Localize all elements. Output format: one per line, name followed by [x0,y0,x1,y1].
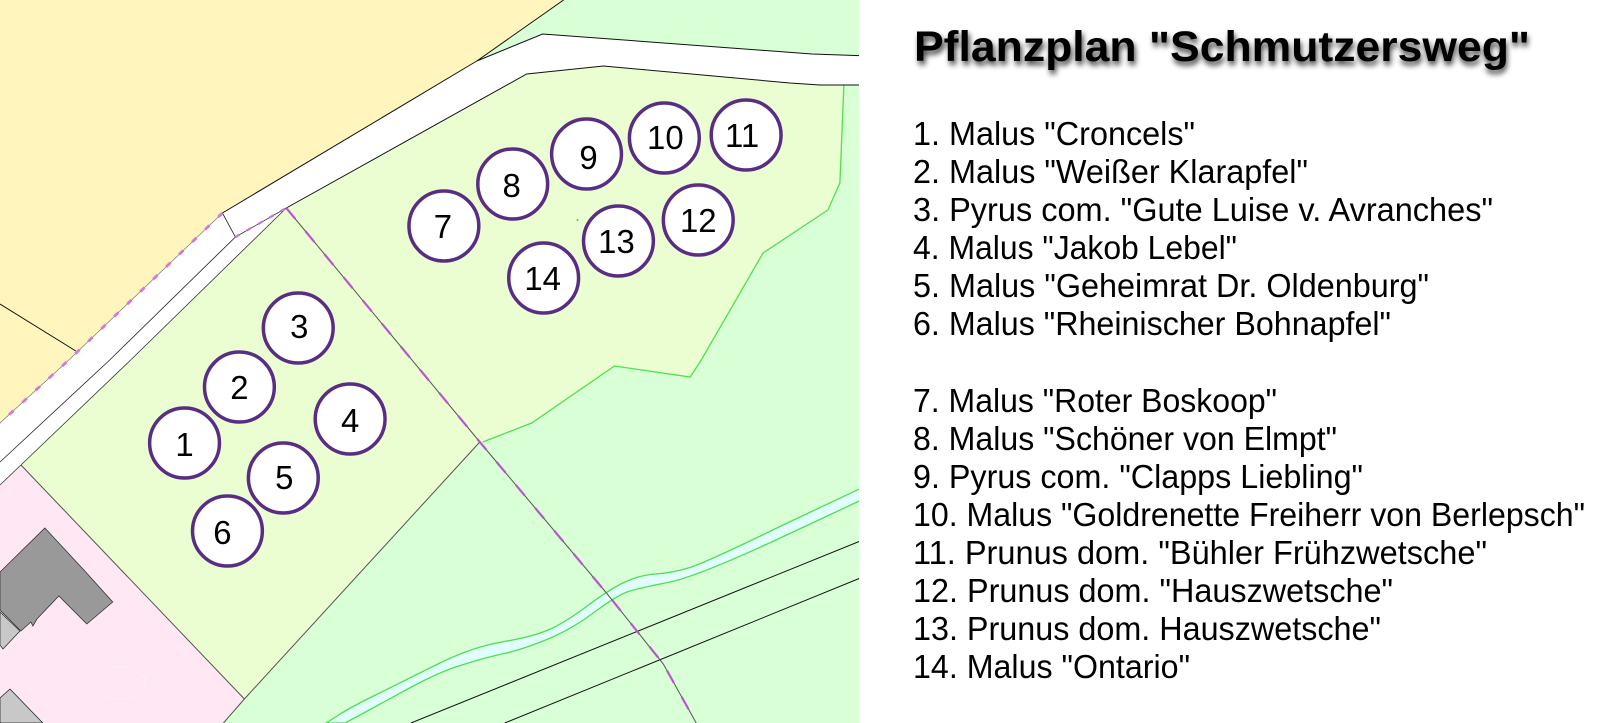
tree 6: 6 [213,514,232,551]
tree 10: 10 [647,119,684,156]
tree 7: 7 [434,208,452,245]
legend: plant list, group 1 [913,115,1493,342]
boundary line to the bottom [223,699,244,723]
building: dark grey [0,528,113,631]
tree 1 [150,408,219,478]
yellow parcel and road edge [222,61,477,213]
tree 13: 13 [598,223,635,260]
parcel boundary lines [21,442,480,699]
legend: plant list, group 1: 4. Malus "Jakob Lebel" [913,229,1237,266]
tree 11: 11 [725,117,759,154]
utility line two [505,575,868,723]
tree 1: 1 [175,426,194,463]
legend: plant list, group 1: 1. Malus "Croncels" [913,115,1195,152]
road edge purple overlay [0,213,222,423]
road outline upper [477,0,868,61]
legend: plant list, group 2: 9. Pyrus com. "Clapps Liebling" [913,458,1363,495]
legend: plant list, group 2 [913,382,1585,685]
tree 12: 12 [680,202,717,239]
legend: plant list, group 2: 14. Malus "Ontario" [913,648,1190,685]
title: Pflanzplan "Schmutzersweg" [914,23,1530,71]
legend: plant list, group 1: 2. Malus "Weißer Klarapfel" [913,153,1308,190]
building: light grey annex [0,612,20,649]
tree 11 [711,100,781,170]
road edge line [0,208,286,485]
legend: plant list, group 1: 3. Pyrus com. "Gute Luise v. Avranches" [913,191,1493,228]
tree 8: 8 [503,167,521,204]
tree 14 [509,243,579,313]
yellow parcel divider [0,304,76,351]
tree 4 [315,384,385,454]
building: light grey lower [0,689,43,723]
legend: plant list, group 2: 13. Prunus dom. Hauszwetsche" [913,610,1381,647]
tree 2: 2 [230,369,249,406]
parcel line [286,208,696,723]
faint tree outline [94,667,146,699]
parcel: yellow area [0,0,564,423]
map background: meadow [222,0,859,723]
parcel: lower orchard [21,208,480,699]
tree 8 [478,149,548,219]
tree markers [150,100,781,566]
tree 13 [584,206,653,276]
parcel line purple overlay [286,208,696,723]
parcel: pink garden [0,465,244,723]
tree 3: 3 [290,308,308,345]
tree 7 [409,191,479,261]
tree 6 [193,496,262,566]
tree 5: 5 [275,459,293,496]
tree 5 [248,443,318,513]
title: Pflanzplan "Schmutzersweg" [916,27,1531,75]
green marker dot [577,219,579,221]
parcel: upper orchard [286,66,844,442]
road inner lines [0,213,235,462]
stream [326,485,868,723]
tree 10 [629,103,699,173]
legend: plant list, group 2: 10. Malus "Goldrenette Freiherr von Berlepsch" [913,496,1585,533]
legend: plant list, group 2: 12. Prunus dom. "Hauszwetsche" [913,572,1393,609]
legend: plant list, group 2: 11. Prunus dom. "Bühler Frühzwetsche" [913,534,1487,571]
small purple overlay at road crossing [235,208,286,237]
tree 3 [263,293,333,363]
boundary: green field edge [483,85,844,442]
tree 9 [552,119,621,189]
yellow parcel lower edge [0,213,222,423]
tree 9: 9 [579,139,598,176]
legend: plant list, group 1: 6. Malus "Rheinischer Bohnapfel" [913,305,1391,342]
legend: plant list, group 1: 5. Malus "Geheimrat Dr. Oldenburg" [913,267,1429,304]
legend: plant list, group 2: 7. Malus "Roter Boskoop" [913,382,1277,419]
tree 2 [204,352,274,422]
tree 4: 4 [341,402,359,439]
panel: site map [0,0,868,723]
utility line one [411,538,868,723]
tree 14: 14 [524,260,561,297]
legend: plant list, group 2: 8. Malus "Schöner von Elmpt" [913,420,1337,457]
road [0,34,868,485]
tree 12 [663,185,733,255]
road outline lower [286,66,868,208]
